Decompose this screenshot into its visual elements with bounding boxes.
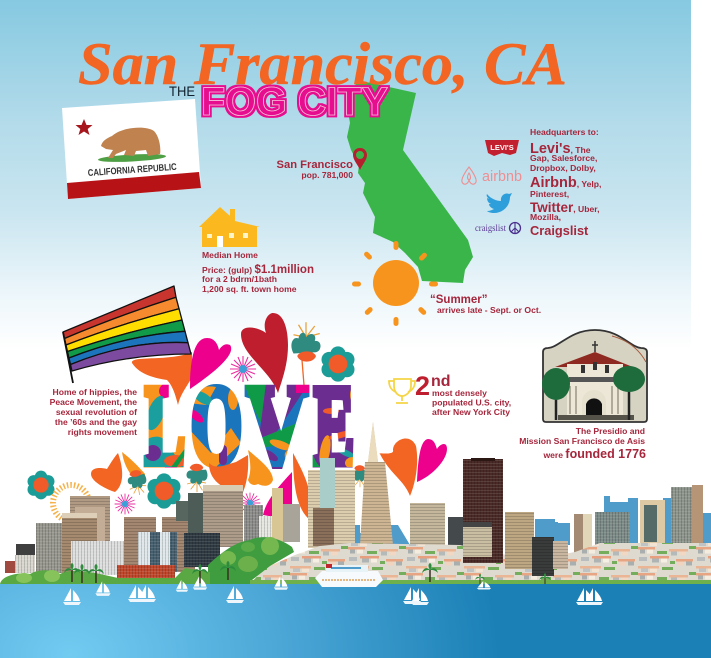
icon: sun bbox=[352, 241, 438, 326]
mission text: The Presidio and bbox=[576, 426, 645, 436]
burst flower bbox=[230, 356, 256, 382]
right hearts bbox=[379, 438, 447, 496]
hippies text: rights movement bbox=[68, 427, 137, 437]
flag bear bbox=[101, 128, 160, 158]
teal flower bbox=[322, 346, 354, 382]
2nd density text: 2 bbox=[415, 371, 430, 401]
headquarters text: Headquarters to: bbox=[530, 127, 599, 137]
headquarters text bbox=[530, 127, 601, 238]
median home text: for a 2 bdrm/1bath bbox=[202, 274, 277, 284]
skyline: back buildings bbox=[5, 422, 711, 575]
San Francisco pin bbox=[353, 148, 367, 170]
orange heart top bbox=[132, 352, 192, 405]
LOVE lettering: V bbox=[247, 364, 307, 488]
2nd density text: populated U.S. city, bbox=[432, 398, 511, 408]
bay water bbox=[0, 584, 711, 658]
hippies text: the ’60s and the gay bbox=[55, 417, 137, 427]
magenta heart bbox=[190, 338, 231, 389]
median home text bbox=[202, 250, 314, 294]
population: pop. 781,000 bbox=[301, 170, 353, 180]
icon: airbnb bbox=[462, 167, 522, 185]
skyline: front buildings bbox=[463, 458, 568, 576]
LOVE lettering: L bbox=[145, 364, 185, 488]
2nd density text: nd bbox=[431, 373, 451, 390]
hippies text bbox=[50, 387, 137, 437]
icon: house bbox=[199, 207, 260, 247]
icon: craigslist bbox=[475, 222, 520, 234]
mission text bbox=[519, 426, 646, 461]
shoreline trees and green hill bbox=[0, 537, 711, 586]
headquarters text: Dropbox, Dolby, bbox=[530, 163, 596, 173]
mission text: Mission San Francisco de Asis bbox=[519, 436, 645, 446]
lower left flowers and hearts bbox=[28, 450, 368, 521]
2nd density text: most densely bbox=[432, 388, 487, 398]
summer text: arrives late - Sept. or Oct. bbox=[437, 305, 541, 315]
sky background bbox=[0, 0, 691, 350]
California flag bbox=[62, 99, 201, 199]
trophy icon bbox=[389, 379, 415, 403]
icon: craigslist: craigslist bbox=[475, 224, 506, 234]
median home text: 1,200 sq. ft. town home bbox=[202, 284, 297, 294]
red heart bbox=[241, 313, 288, 393]
headquarters text: Mozilla, bbox=[530, 212, 561, 222]
2nd density text bbox=[415, 371, 511, 417]
headquarters text: Pinterest, bbox=[530, 189, 569, 199]
headquarters text: Levi's, The bbox=[530, 141, 591, 157]
hippies text: Peace Movement, the bbox=[50, 397, 137, 407]
headquarters text: Airbnb, Yelp, bbox=[530, 175, 601, 191]
headquarters text: Craigslist bbox=[530, 223, 589, 238]
summer text bbox=[430, 294, 541, 315]
hillside houses bbox=[250, 543, 711, 584]
sailboats bbox=[63, 576, 603, 605]
icon: Twitter bird bbox=[487, 193, 512, 213]
icon: Levi's: LEVI'S bbox=[490, 143, 514, 152]
summer text: “Summer” bbox=[430, 294, 488, 306]
LOVE lettering: E bbox=[314, 364, 354, 488]
subtitle label: the: THE bbox=[169, 84, 195, 99]
icon: airbnb: airbnb bbox=[482, 169, 522, 185]
San Francisco label: San Francisco bbox=[277, 159, 353, 171]
LOVE lettering: O bbox=[191, 364, 242, 488]
2nd density text: after New York City bbox=[432, 407, 510, 417]
cruise ship bbox=[315, 564, 383, 587]
median home text: Median Home bbox=[202, 250, 258, 260]
map of California bbox=[347, 80, 473, 283]
rainbow flag bbox=[63, 286, 191, 383]
subtitle: fog city: FOG CITY bbox=[201, 80, 388, 124]
title: San Francisco, CA bbox=[78, 31, 567, 97]
mission illustration bbox=[542, 330, 647, 422]
flag star bbox=[76, 119, 92, 135]
headquarters text: Twitter, Uber, bbox=[530, 200, 600, 215]
flag caption: CALIFORNIA REPUBLIC bbox=[87, 162, 177, 179]
plant sprig bbox=[291, 322, 321, 385]
mission text: were founded 1776 bbox=[542, 447, 646, 461]
hippies text: Home of hippies, the bbox=[52, 387, 137, 397]
icon: Levi's bbox=[485, 140, 519, 156]
hippies text: sexual revolution of bbox=[56, 407, 137, 417]
headquarters text: Gap, Salesforce, bbox=[530, 153, 597, 163]
flag ground bbox=[98, 153, 166, 163]
median home text: Price: (gulp) $1.1million bbox=[202, 264, 314, 276]
